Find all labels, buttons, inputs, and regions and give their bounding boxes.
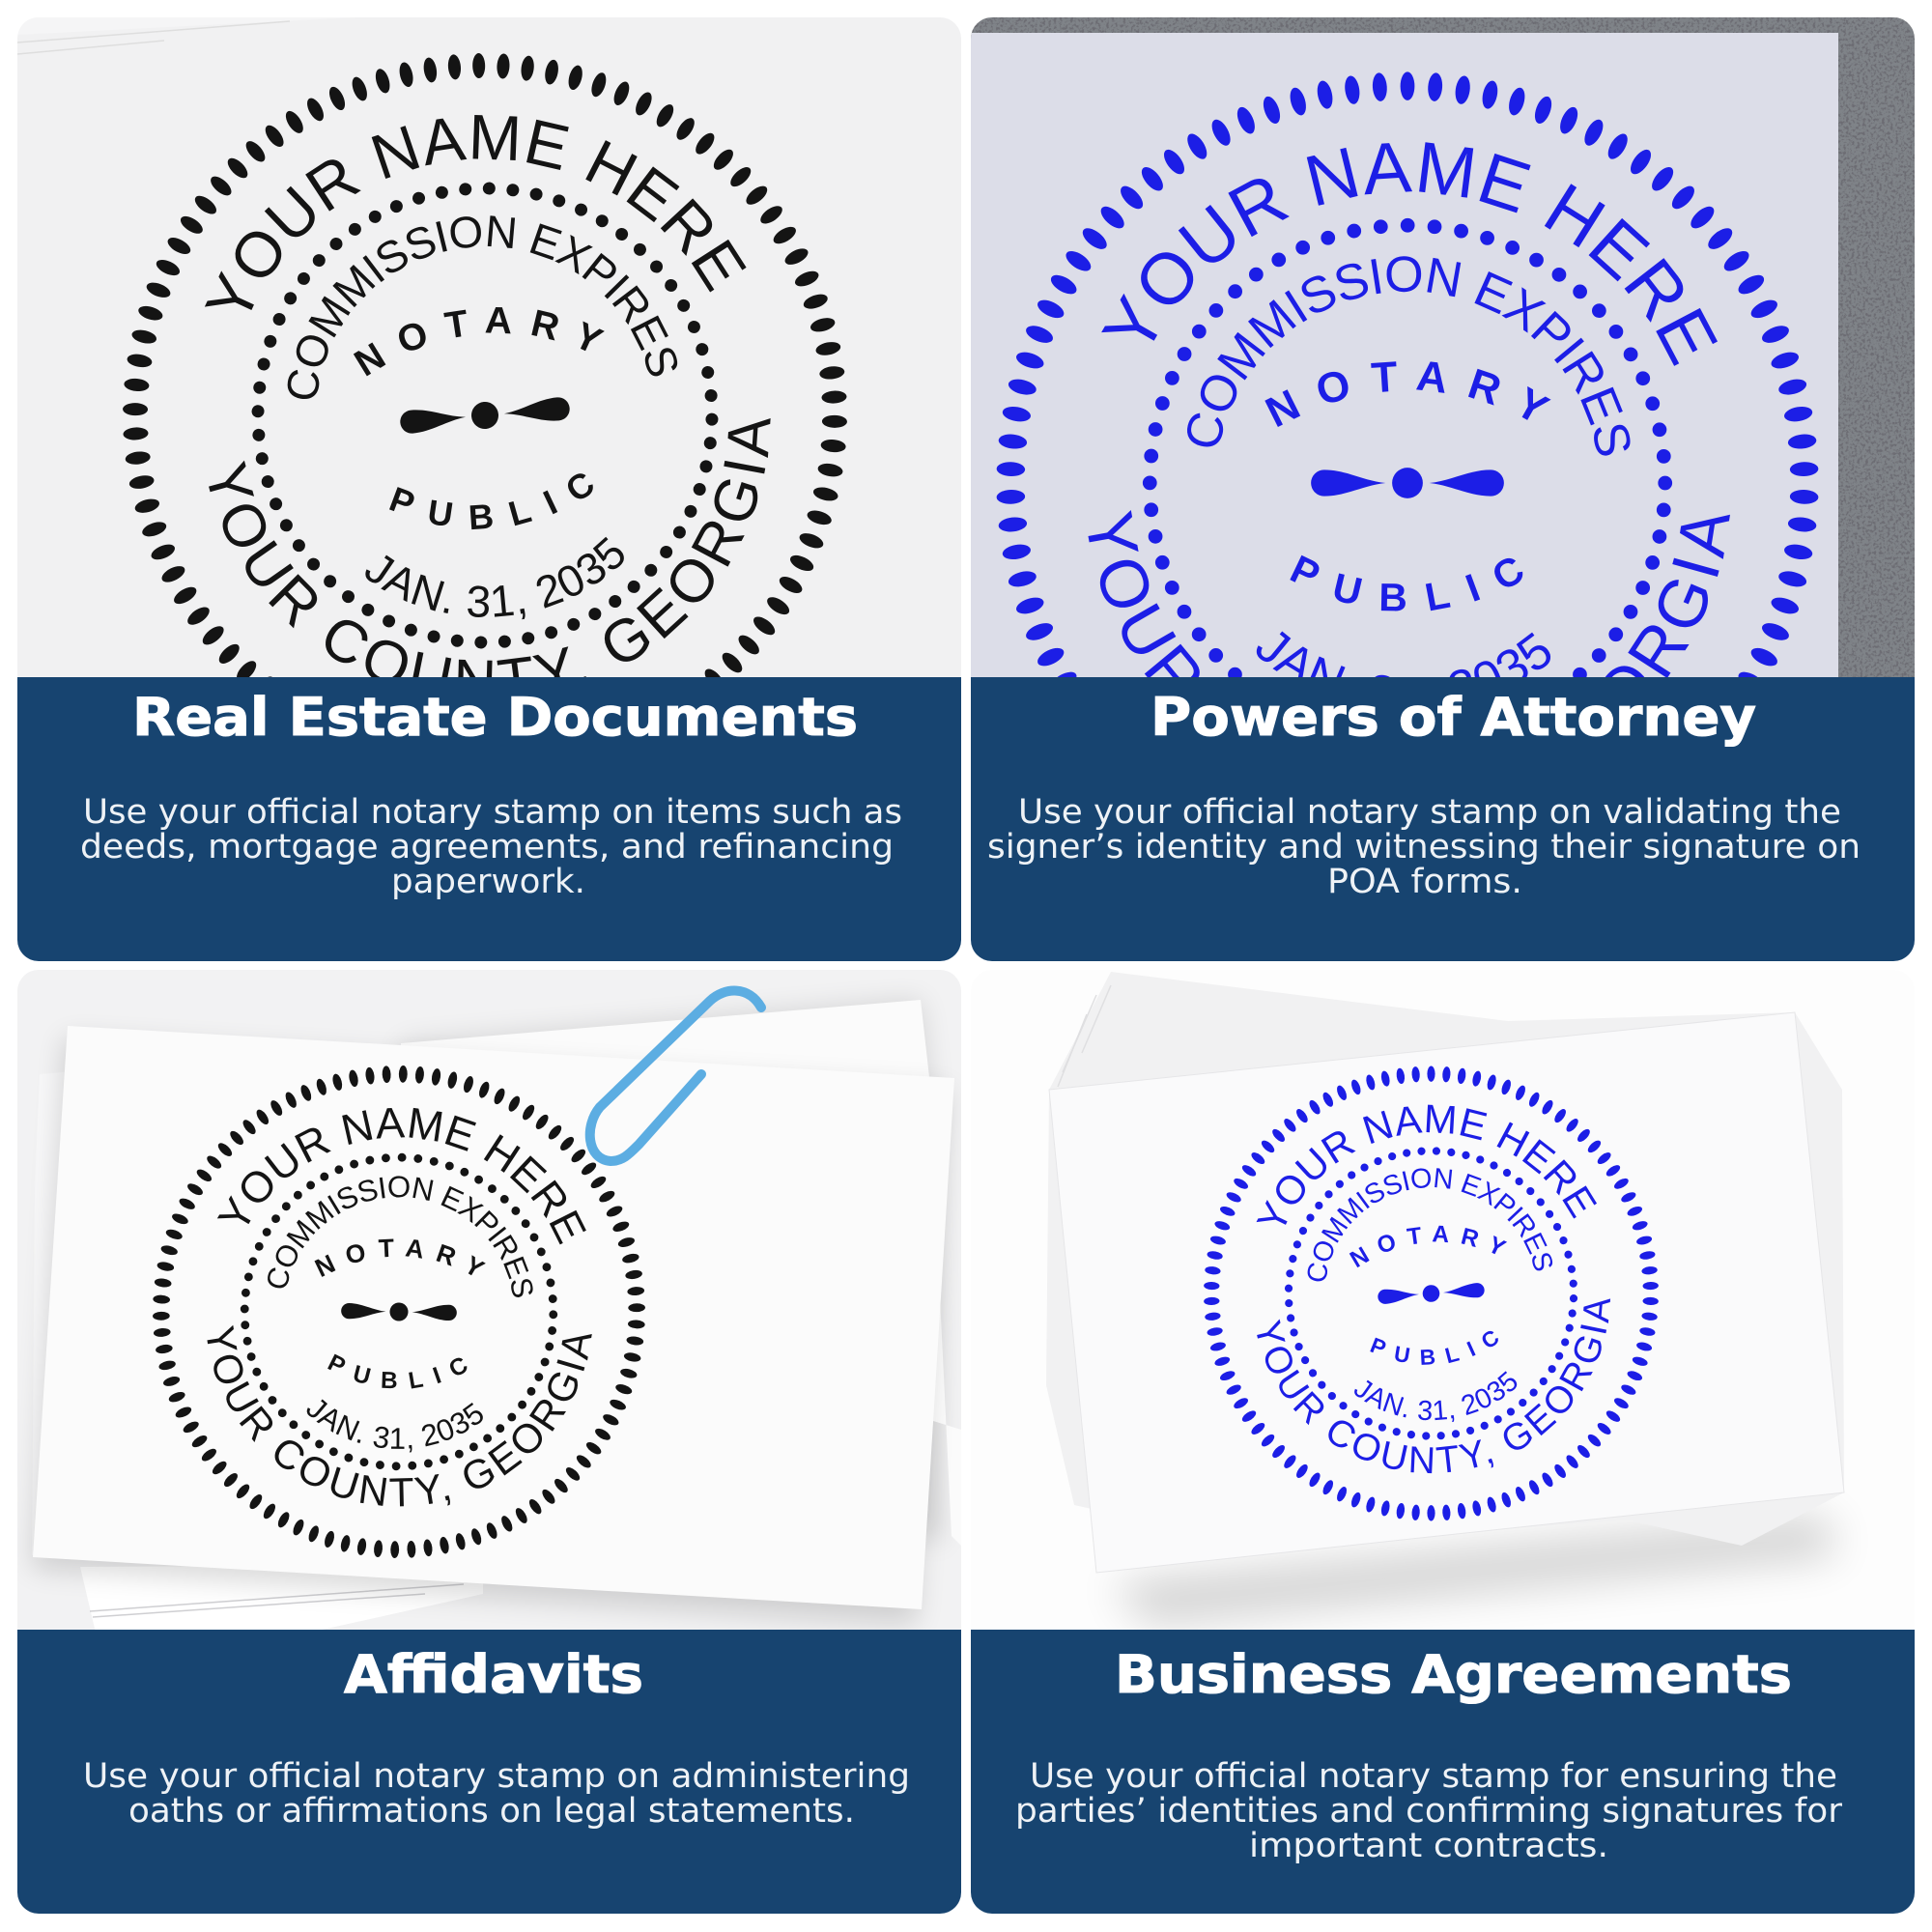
text block: powers of attorney description: Use your official notary stamp on validating the [1018, 793, 1841, 832]
heading: affidavits: Affidavits [344, 1644, 643, 1705]
panel: powers of attorney [971, 17, 1915, 961]
stamp: black notary seal: COMMISSION EXPIRES [268, 1176, 533, 1297]
stamp: black notary seal: JAN. 31, 2035 [365, 537, 624, 620]
stamp: blue notary seal: YOUR NAME HERE [1101, 142, 1718, 366]
stamp: black notary seal: YOUR COUNTY, GEORGIA [209, 418, 771, 677]
stamp: blue notary seal: COMMISSION EXPIRES [1308, 1168, 1553, 1281]
stamp: blue notary seal: YOUR COUNTY, GEORGIA [1088, 510, 1730, 677]
stamp: black notary seal: NOTARY [354, 307, 605, 377]
stamp: black notary seal: YOUR NAME HERE [205, 115, 747, 310]
heading: powers of attorney: Powers of Attorney [1151, 687, 1756, 748]
heading: business agreements: Business Agreements [1115, 1644, 1792, 1705]
stamp: blue notary seal [1204, 1066, 1659, 1520]
photo: stacked cards with paperclip [17, 970, 961, 1914]
text block: powers of attorney description: signer’s identity and witnessing their signature on [987, 828, 1861, 867]
stamp: blue notary seal [997, 71, 1818, 677]
panel: real estate documents [17, 17, 961, 961]
text block: business agreements description: parties’ identities and confirming signatures for [1015, 1792, 1843, 1831]
text block: powers of attorney description: POA forms. [1327, 863, 1522, 901]
text block: affidavits description: oaths or affirmations on legal statements. [128, 1792, 855, 1831]
heading: real estate documents: Real Estate Documents [132, 687, 858, 748]
stamp: black notary seal: COMMISSION EXPIRES [288, 215, 678, 399]
stamp: blue notary seal: PUBLIC [1290, 554, 1522, 611]
text block: real estate description: deeds, mortgage agreements, and refinancing [80, 828, 894, 867]
stamp: blue notary seal: YOUR NAME HERE [1256, 1105, 1597, 1225]
photo: stamped paper black [17, 17, 961, 961]
photo: stamped paper blue on concrete [971, 17, 1915, 961]
stamp: blue notary seal: JAN. 31, 2035 [1354, 1371, 1517, 1422]
panel: business agreements [971, 972, 1915, 1914]
stamp: black notary seal: JAN. 31, 2035 [307, 1399, 483, 1453]
text block: affidavits description [83, 1757, 910, 1831]
stamp: blue notary seal: JAN. 31, 2035 [1256, 632, 1551, 677]
stamp: black notary seal [153, 1065, 645, 1558]
stamp: blue notary seal: PUBLIC [1370, 1331, 1498, 1365]
caption band [971, 677, 1915, 961]
caption band [971, 1630, 1915, 1914]
icon: blue paperclip [590, 991, 761, 1161]
stamp: black notary seal [123, 53, 847, 677]
caption band [17, 1630, 961, 1914]
stamp: blue notary seal: COMMISSION EXPIRES [1187, 256, 1631, 456]
text block: powers of attorney description [987, 793, 1861, 901]
caption band [17, 677, 961, 961]
text block: business agreements description [1015, 1757, 1843, 1865]
text block: real estate description [80, 793, 902, 901]
text block: real estate description: paperwork. [391, 863, 585, 901]
stamp: blue notary seal: YOUR COUNTY, GEORGIA [1257, 1298, 1611, 1474]
text block: business agreements description: important contracts. [1249, 1827, 1608, 1865]
stamp: blue notary seal: NOTARY [1349, 1225, 1507, 1267]
text block: business agreements description: Use your official notary stamp for ensuring the [1030, 1757, 1837, 1796]
photo: stack of blue-stamped cards [971, 972, 1915, 1914]
stamp: black notary seal: YOUR COUNTY, GEORGIA [207, 1325, 592, 1507]
text block: real estate description: Use your official notary stamp on items such as [83, 793, 902, 832]
stamp: black notary seal: PUBLIC [389, 473, 593, 529]
panel: affidavits [17, 970, 961, 1914]
stamp: blue notary seal: NOTARY [1264, 361, 1551, 427]
text block: affidavits description: Use your official notary stamp on administering [83, 1757, 910, 1796]
stamp: black notary seal: NOTARY [315, 1238, 486, 1277]
stamp: black notary seal: YOUR NAME HERE [216, 1107, 586, 1244]
stamp: black notary seal: PUBLIC [327, 1354, 468, 1389]
